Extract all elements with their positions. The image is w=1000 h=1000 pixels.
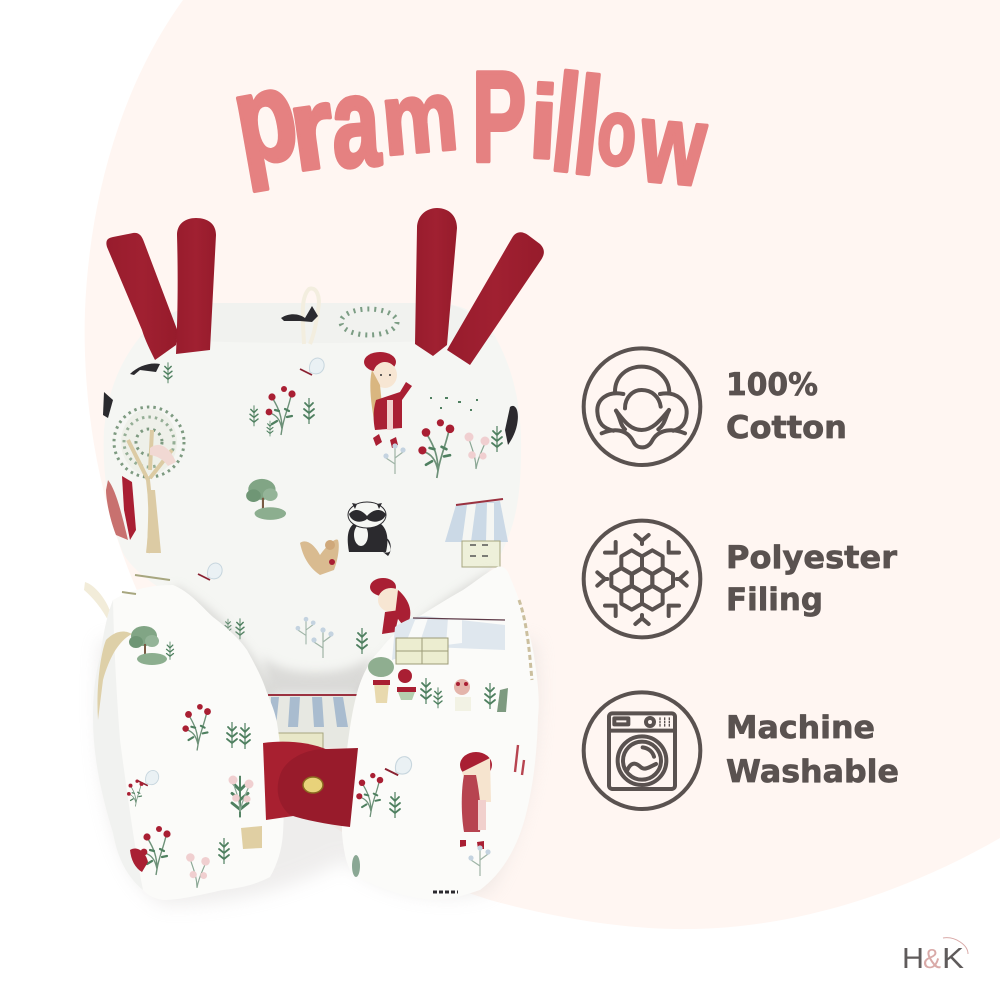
pot plant print	[228, 776, 262, 849]
skunk print right	[505, 406, 518, 445]
flower cluster print right	[418, 419, 454, 478]
herb print	[304, 398, 314, 424]
logo: H&K	[902, 938, 968, 975]
shop print top of left cushion	[122, 575, 170, 594]
loop tab left	[84, 582, 113, 622]
text: Machine Washable: Washable	[726, 754, 899, 790]
awning print right cushion	[392, 616, 505, 664]
awning print right	[445, 499, 508, 567]
pillow product	[84, 208, 544, 905]
text: Polyester Filing	[726, 540, 898, 618]
red flowers print right cushion	[356, 773, 383, 817]
title: P	[472, 45, 526, 189]
main back cushion	[103, 288, 521, 700]
text: Machine Washable: Machine	[726, 710, 875, 746]
icon: cotton	[584, 348, 700, 465]
back strap: right	[415, 208, 457, 356]
right edge print	[515, 745, 524, 775]
right side cushion	[342, 567, 539, 900]
title: a	[328, 51, 384, 195]
bush print	[246, 479, 286, 520]
icon: washing machine	[584, 692, 700, 809]
hanging loop	[303, 288, 319, 344]
text: 100% Cotton	[726, 367, 847, 446]
butterfly print center	[198, 563, 222, 580]
strap round flap	[278, 748, 358, 827]
side cushion shadows on back cushion	[173, 575, 495, 700]
left side cushion	[84, 575, 284, 900]
text: Machine Washable	[726, 710, 899, 790]
title: l	[568, 50, 608, 204]
greenery print top	[341, 309, 397, 335]
gold snap button	[303, 777, 323, 793]
centre flowers print	[296, 617, 316, 644]
centre panel with awning	[268, 695, 360, 749]
butterfly print	[300, 358, 324, 375]
bush and squirrel print left cushion	[97, 626, 174, 720]
skunk print top	[281, 306, 318, 322]
left cushion side seam shading	[93, 600, 143, 890]
text: 100% Cotton: Cotton	[726, 410, 847, 446]
pillow ground shadow	[98, 640, 538, 905]
logo: H&K: K	[942, 943, 965, 975]
strap back piece	[263, 742, 328, 820]
top fold shading	[140, 303, 493, 343]
logo: H&K: H	[902, 943, 924, 975]
title: p	[223, 43, 307, 194]
red flowers print left cushion	[182, 704, 211, 750]
title: r	[281, 61, 342, 195]
text: Polyester Filing: Filing	[726, 582, 823, 618]
tree print	[114, 407, 184, 553]
text: Polyester Filing: Polyester	[726, 540, 898, 576]
butterfly print right cushion	[385, 757, 412, 775]
girl print centre	[370, 578, 410, 634]
red flowers print	[266, 386, 296, 435]
back strap: far left	[106, 233, 178, 360]
butterfly print left cushion	[137, 770, 159, 786]
bottom flowers print left cushion	[141, 826, 171, 875]
girl print left edge	[103, 392, 136, 540]
raccoon print	[348, 502, 391, 556]
squirrel print	[300, 539, 339, 575]
logo: H&K: &	[923, 943, 941, 974]
back strap: far right	[447, 232, 544, 365]
text: 100% Cotton: 100%	[726, 367, 818, 403]
cushion bottom shadow	[262, 655, 372, 695]
title: i	[527, 65, 560, 181]
title: o	[593, 79, 641, 187]
title	[223, 43, 711, 211]
title: l	[546, 47, 586, 201]
pots print	[368, 657, 508, 712]
girl print right cushion	[460, 752, 492, 849]
skunk print left	[130, 363, 160, 375]
bottom print right cushion	[468, 845, 491, 876]
back strap: left	[176, 218, 216, 354]
title: m	[377, 58, 462, 177]
girl print top right	[364, 352, 412, 448]
title: w	[635, 78, 711, 211]
front red strap with snap button	[263, 742, 358, 827]
icon: polyester hexagons	[584, 521, 700, 637]
